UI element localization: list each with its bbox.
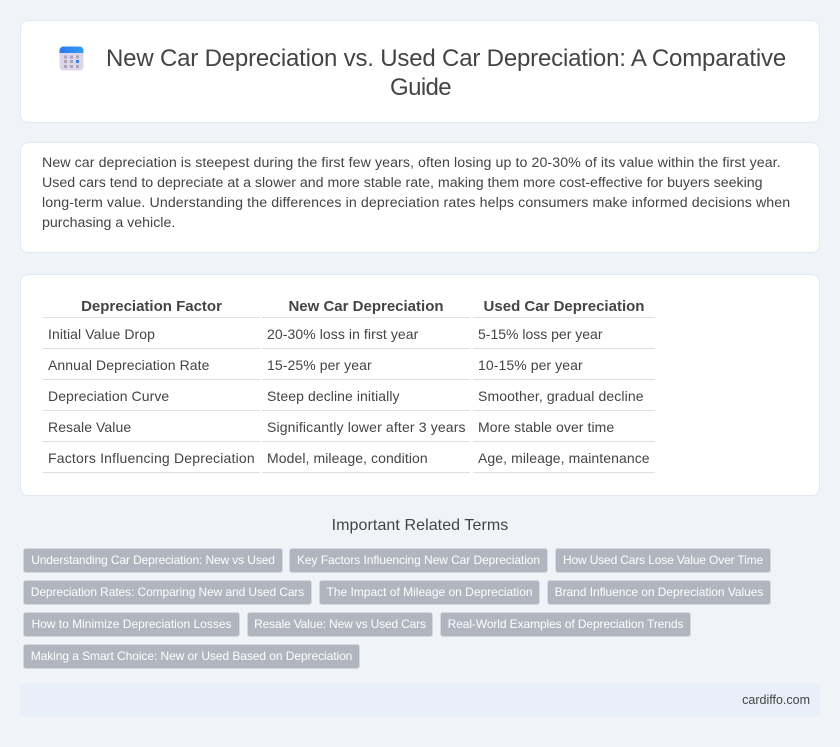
text block: intro [42, 155, 790, 231]
tag: The Impact of Mileage on Depreciation [326, 585, 533, 599]
icon: calendar [60, 46, 84, 70]
tag [440, 612, 691, 637]
table: depreciation comparison: Steep decline initially [267, 388, 400, 404]
tag list: related terms [23, 548, 771, 669]
panel: intro text [20, 142, 820, 253]
table: depreciation comparison: Used Car Depreciation [484, 298, 644, 315]
tag: Real-World Examples of Depreciation Trends [448, 617, 683, 631]
table: depreciation comparison: 10-15% per year [478, 357, 583, 373]
tag: Resale Value: New vs Used Cars [254, 617, 426, 631]
tag [547, 580, 771, 605]
text block: intro: purchasing a vehicle. [42, 215, 175, 231]
footer bar [20, 683, 820, 717]
title [106, 45, 786, 101]
text block: intro: Used cars tend to depreciate at a slower and more stable rate, making them more cost-effective for buyers seeking [42, 175, 763, 191]
table: depreciation comparison: Annual Depreciation Rate [48, 357, 209, 373]
tag: Brand Influence on Depreciation Values [555, 585, 763, 599]
tag [23, 644, 360, 669]
table: depreciation comparison: 5-15% loss per year [478, 326, 603, 342]
table: depreciation comparison: Resale Value [48, 419, 131, 435]
table: depreciation comparison: Factors Influencing Depreciation [48, 450, 255, 466]
tag: How to Minimize Depreciation Losses [31, 617, 232, 631]
title: Guide [390, 74, 451, 101]
tag: Understanding Car Depreciation: New vs Used [31, 553, 275, 567]
table: depreciation comparison [43, 298, 655, 473]
tag: Depreciation Rates: Comparing New and Used Cars [31, 585, 304, 599]
tag [23, 580, 312, 605]
tag [23, 612, 240, 637]
heading: related terms: Important Related Terms [332, 517, 508, 534]
panel: title header [20, 20, 820, 123]
text block: intro: New car depreciation is steepest during the first few years, often losing up to 20-30% of its value within the first year. [42, 155, 781, 171]
tag: Key Factors Influencing New Car Depreciation [297, 553, 540, 567]
footer source text: cardiffo.com [742, 693, 810, 707]
table: depreciation comparison: Initial Value Drop [48, 326, 155, 342]
tag [289, 548, 548, 573]
tag: Making a Smart Choice: New or Used Based on Depreciation [31, 649, 352, 663]
tag [23, 548, 283, 573]
table: depreciation comparison: Model, mileage, condition [267, 450, 428, 466]
tag [555, 548, 771, 573]
table: depreciation comparison: Smoother, gradual decline [478, 388, 644, 404]
table: depreciation comparison: More stable over time [478, 419, 614, 435]
tag [247, 612, 433, 637]
table: depreciation comparison: Significantly lower after 3 years [267, 419, 466, 435]
panel: comparison table [20, 274, 820, 496]
table: depreciation comparison: Depreciation Factor [81, 298, 222, 315]
table: depreciation comparison: 20-30% loss in first year [267, 326, 418, 342]
table: depreciation comparison: Depreciation Curve [48, 388, 169, 404]
tag [319, 580, 540, 605]
table: depreciation comparison: 15-25% per year [267, 357, 372, 373]
title: New Car Depreciation vs. Used Car Depreciation: A Comparative [106, 45, 786, 72]
tag: How Used Cars Lose Value Over Time [563, 553, 763, 567]
table: depreciation comparison: Age, mileage, maintenance [478, 450, 650, 466]
text block: intro: long-term value. Understanding the differences in depreciation rates helps consumers make informed decisions when [42, 195, 790, 211]
table: depreciation comparison: New Car Depreciation [288, 298, 444, 315]
